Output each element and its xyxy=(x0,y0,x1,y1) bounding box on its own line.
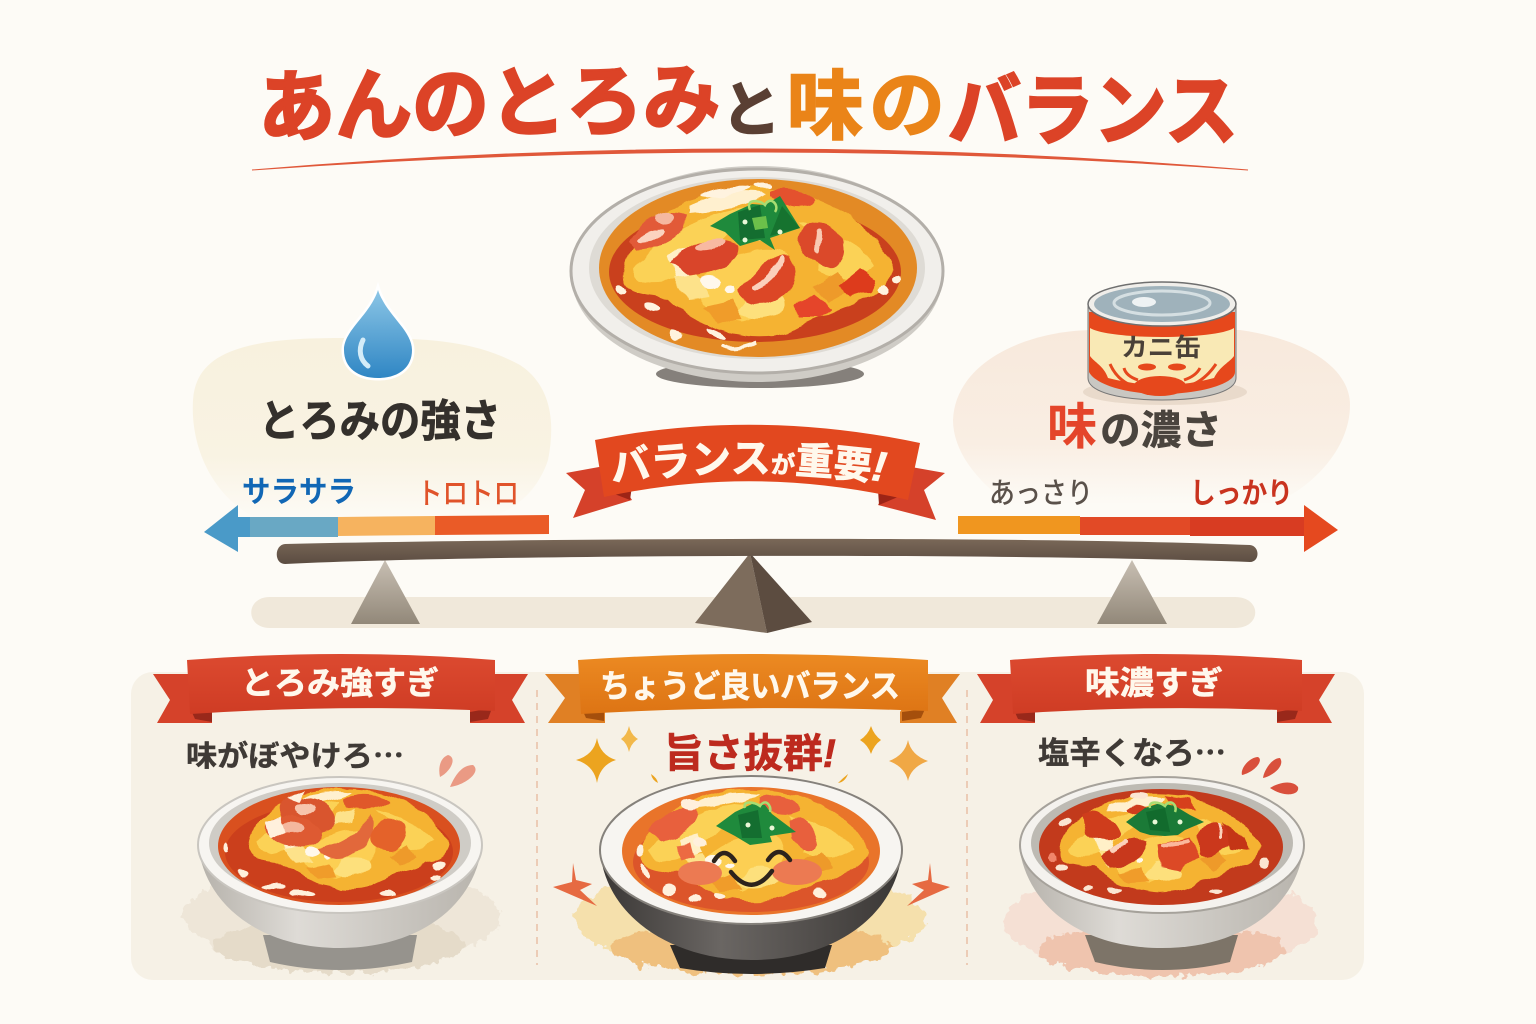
ribbon: too salty xyxy=(977,654,1335,723)
right bowl xyxy=(1002,777,1318,976)
smiling face xyxy=(714,852,790,885)
caption: flavor blurs: 味がぼやけろ … xyxy=(186,733,404,775)
seesaw: ground shadow xyxy=(251,597,1255,628)
label: sarasara: サラサラ xyxy=(242,476,356,509)
title xyxy=(257,56,1238,155)
left bowl xyxy=(184,777,500,973)
burst left xyxy=(553,863,597,906)
left panel: thickness xyxy=(193,338,551,520)
crab xyxy=(1110,364,1216,396)
sparkles xyxy=(576,726,928,783)
topping xyxy=(716,802,796,845)
label: torotoro: トロトロ xyxy=(417,478,519,511)
seesaw: center fulcrum xyxy=(695,553,812,633)
ribbon: balance is important xyxy=(566,424,945,520)
title underline xyxy=(252,149,1248,170)
tomato pieces xyxy=(1082,796,1250,870)
pale flecks xyxy=(636,799,824,903)
sausage pieces xyxy=(263,791,407,858)
heading: flavor xyxy=(1047,399,1222,455)
table stain xyxy=(184,864,500,973)
title: の xyxy=(869,64,945,147)
table stain xyxy=(1002,872,1318,976)
caption: too salty: 塩辛くなろ… xyxy=(1038,728,1226,773)
heading: flavor: 味 xyxy=(1047,399,1097,455)
title: あんのとろみ xyxy=(257,56,721,152)
pale flecks xyxy=(224,790,445,899)
can label text: カニ缶 xyxy=(1121,334,1201,362)
ribbon: too salty: 味濃すぎ xyxy=(1085,665,1223,701)
ribbon: too thick xyxy=(153,654,528,723)
label: assari: あっさり xyxy=(989,478,1093,510)
sweat marks right xyxy=(1242,757,1298,794)
sweat marks left xyxy=(439,755,476,787)
tomato pieces xyxy=(648,795,818,862)
center bowl xyxy=(575,776,925,974)
ribbon: just right: ちょうど良いバランス xyxy=(600,668,900,704)
caption: delicious: 旨さ抜群! xyxy=(664,732,836,776)
divider left xyxy=(536,690,538,965)
table stain xyxy=(575,866,925,974)
label: shikkari: しっかり xyxy=(1190,478,1293,510)
cheeks xyxy=(678,859,822,885)
heading: thickness: とろみの強さ xyxy=(259,397,501,446)
icon: water drop xyxy=(344,290,412,378)
ribbon: too thick: とろみ強すぎ xyxy=(241,665,439,701)
panel: comparison background xyxy=(131,672,1364,980)
ribbon: balance is important: バランスが重要! xyxy=(612,442,888,484)
tomato pieces xyxy=(628,188,876,318)
main dish: plate xyxy=(571,166,943,388)
arrow: flavor scale xyxy=(958,505,1338,552)
seesaw: left pedestal xyxy=(351,560,420,624)
seesaw: beam xyxy=(277,539,1258,564)
topping xyxy=(1126,802,1204,836)
arrow: thickness scale xyxy=(204,505,549,552)
right panel: flavor xyxy=(953,330,1350,505)
ribbon: just right xyxy=(545,654,960,723)
heading: flavor: の濃さ xyxy=(1100,409,1222,453)
icon: crab can xyxy=(1083,282,1247,405)
divider right xyxy=(966,690,968,965)
topping: green onion xyxy=(710,196,800,250)
egg-white flecks xyxy=(613,183,902,349)
title: と xyxy=(721,77,781,144)
title: バランス xyxy=(948,67,1238,155)
title: 味 xyxy=(787,65,863,150)
burst right xyxy=(907,863,950,906)
seesaw: right pedestal xyxy=(1097,560,1167,624)
pale flecks xyxy=(1048,793,1269,894)
